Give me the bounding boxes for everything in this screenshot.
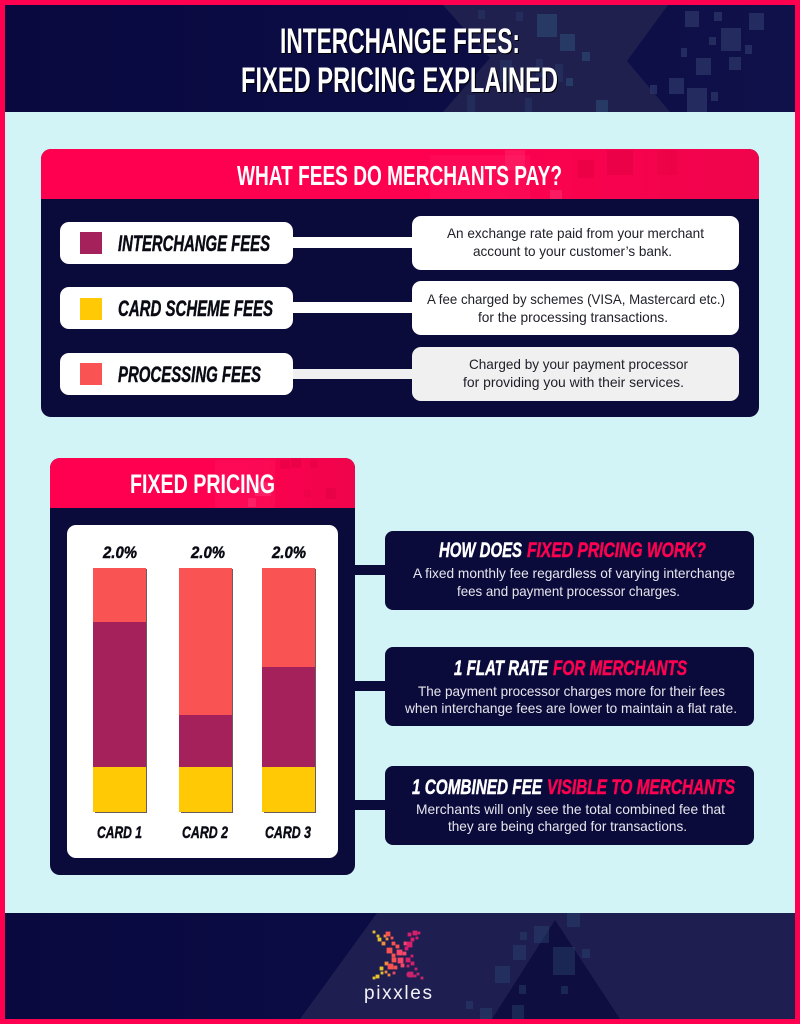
bar: card 3: CARD 3 bbox=[265, 823, 311, 842]
row: card scheme fees bbox=[60, 281, 739, 335]
callout: 1 combined fee visible to merchants: Merchants will only see the total combined fee that bbox=[416, 801, 725, 817]
callout: 1 flat rate for merchants: when interchange fees are lower to maintain a flat rate. bbox=[404, 700, 737, 716]
panel: fixed pricing chart bbox=[50, 458, 355, 875]
title: INTERCHANGE FEES: bbox=[280, 22, 520, 61]
callout: 1 flat rate for merchants: FOR MERCHANTS bbox=[553, 657, 687, 680]
bar: card 2: 2.0% bbox=[190, 544, 225, 562]
logo wordmark: pixxles bbox=[364, 983, 432, 1004]
row: interchange fees: INTERCHANGE FEES bbox=[118, 231, 270, 256]
callout: 1 flat rate for merchants: The payment processor charges more for their fees bbox=[418, 683, 725, 699]
panel heading: FIXED PRICING bbox=[130, 469, 275, 499]
bar: card 2: CARD 2 bbox=[182, 823, 228, 842]
callout: 1 combined fee visible to merchants: VISIBLE TO MERCHANTS bbox=[547, 776, 735, 799]
row: interchange fees: account to your customer’s bank. bbox=[473, 243, 672, 259]
title: FIXED PRICING EXPLAINED bbox=[241, 61, 558, 100]
row: processing fees bbox=[60, 347, 739, 401]
row: card scheme fees: CARD SCHEME FEES bbox=[118, 296, 273, 321]
callout: how does fixed pricing work: fees and payment processor charges. bbox=[457, 583, 680, 599]
row: processing fees: Charged by your payment processor bbox=[469, 356, 688, 372]
bar: card 1 bbox=[93, 544, 147, 842]
row: card scheme fees: for the processing transactions. bbox=[478, 309, 668, 325]
row: processing fees: for providing you with their services. bbox=[463, 374, 684, 390]
panel heading: WHAT FEES DO MERCHANTS PAY? bbox=[237, 160, 562, 191]
bar: card 1: CARD 1 bbox=[97, 823, 142, 842]
bar: card 2 bbox=[179, 544, 233, 842]
callout: 1 flat rate for merchants: 1 FLAT RATE bbox=[454, 657, 549, 680]
logo bbox=[364, 931, 432, 1004]
callout: how does fixed pricing work: FIXED PRICING WORK? bbox=[527, 539, 706, 562]
callout: how does fixed pricing work bbox=[385, 531, 754, 610]
row: card scheme fees: A fee charged by schemes (VISA, Mastercard etc.) bbox=[427, 291, 725, 307]
bar: card 3 bbox=[262, 544, 316, 842]
callout: 1 combined fee visible to merchants: 1 COMBINED FEE bbox=[412, 776, 543, 799]
callout: 1 flat rate for merchants bbox=[385, 647, 754, 726]
bar: card 3: 2.0% bbox=[271, 544, 306, 562]
connectors from chart panel to explanations bbox=[350, 565, 390, 810]
title bbox=[241, 22, 558, 100]
bar: card 1: 2.0% bbox=[102, 544, 137, 562]
row: interchange fees bbox=[60, 216, 739, 270]
logo mark bbox=[373, 931, 423, 979]
callout: 1 combined fee visible to merchants bbox=[385, 766, 754, 845]
panel: what fees do merchants pay bbox=[41, 149, 759, 417]
chart area bbox=[67, 525, 338, 858]
row: processing fees: PROCESSING FEES bbox=[118, 362, 261, 387]
footer banner bbox=[5, 913, 795, 1019]
header banner bbox=[5, 5, 795, 112]
row: interchange fees: An exchange rate paid from your merchant bbox=[447, 225, 704, 241]
callout: how does fixed pricing work: HOW DOES bbox=[439, 539, 522, 562]
callout: how does fixed pricing work: A fixed monthly fee regardless of varying interchange bbox=[413, 565, 735, 581]
callout: 1 combined fee visible to merchants: they are being charged for transactions. bbox=[448, 818, 687, 834]
